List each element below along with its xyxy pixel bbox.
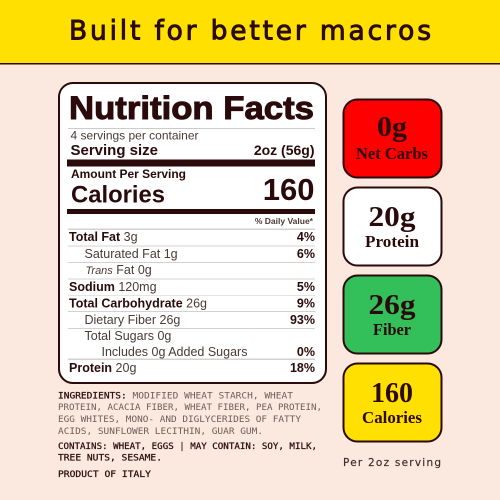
nutrient table <box>69 230 315 375</box>
header banner <box>0 0 500 64</box>
ingredients text block: EGG WHITES, MONO- AND DIGLYCERIDES OF FATTY <box>58 414 301 425</box>
nutrient table: 9% <box>297 296 315 310</box>
ingredients text block: ACIDS, SUNFLOWER LECITHIN, GUAR GUM. <box>58 426 263 437</box>
daily value heading: % Daily Value* <box>255 216 314 226</box>
allergens <box>58 441 317 464</box>
nutrition facts heading: Nutrition Facts <box>69 90 314 126</box>
nutrient table: Sodium 120mg <box>69 280 157 294</box>
stat card: calories <box>344 364 442 442</box>
serving footnote: Per 2oz serving <box>343 457 441 469</box>
nutrient table: 5% <box>297 280 315 294</box>
stat card: calories: 160 <box>371 377 413 409</box>
nutrient table: Total Sugars 0g <box>84 329 171 343</box>
stat card: protein <box>344 188 442 266</box>
amount per serving: Amount Per Serving <box>71 167 186 181</box>
stat card: fiber: Fiber <box>373 320 411 339</box>
calories row <box>71 172 314 208</box>
nutrient table: 18% <box>290 361 315 375</box>
serving size: Serving size <box>70 143 158 159</box>
stat card: net carbs <box>344 100 442 178</box>
stat card: net carbs: Net Carbs <box>356 144 428 163</box>
calories row: Calories <box>71 182 165 208</box>
stat card: net carbs: 0g <box>377 111 408 143</box>
title: Built for better macros <box>69 16 431 46</box>
nutrient table: Total Fat 3g <box>69 230 138 244</box>
nutrient table: 0% <box>297 345 315 359</box>
servings per container: 4 servings per container <box>70 128 198 142</box>
stat card: protein: Protein <box>365 232 420 251</box>
serving size: 2oz (56g) <box>254 142 314 158</box>
allergens: CONTAINS: WHEAT, EGGS | MAY CONTAIN: SOY, MILK, <box>58 441 317 452</box>
nutrient table: Dietary Fiber 26g <box>84 313 180 327</box>
nutrient table: 4% <box>297 230 315 244</box>
nutrient table: Includes 0g Added Sugars <box>102 345 247 359</box>
ingredients text block <box>58 390 322 480</box>
stat card: fiber <box>344 276 442 354</box>
ingredients text block: PROTEIN, ACACIA FIBER, WHEAT FIBER, PEA PROTEIN, <box>58 402 322 413</box>
nutrient table: 93% <box>290 313 315 327</box>
nutrient table: Trans Fat 0g <box>86 263 152 277</box>
serving size <box>70 142 314 159</box>
ingredients text block: INGREDIENTS: MODIFIED WHEAT STARCH, WHEAT <box>58 390 293 402</box>
nutrient table: Saturated Fat 1g <box>84 247 178 261</box>
nutrient table: Total Carbohydrate 26g <box>69 296 207 310</box>
stat card: fiber: 26g <box>368 289 416 321</box>
stat card: protein: 20g <box>368 201 416 233</box>
nutrient table: Protein 20g <box>69 361 136 375</box>
nutrient table: 6% <box>297 247 315 261</box>
stat card: calories: Calories <box>362 408 422 427</box>
allergens: TREE NUTS, SESAME. <box>58 452 162 464</box>
calories row: 160 <box>263 172 314 207</box>
origin: PRODUCT OF ITALY <box>58 469 151 480</box>
panel: nutrition facts label <box>59 83 326 383</box>
